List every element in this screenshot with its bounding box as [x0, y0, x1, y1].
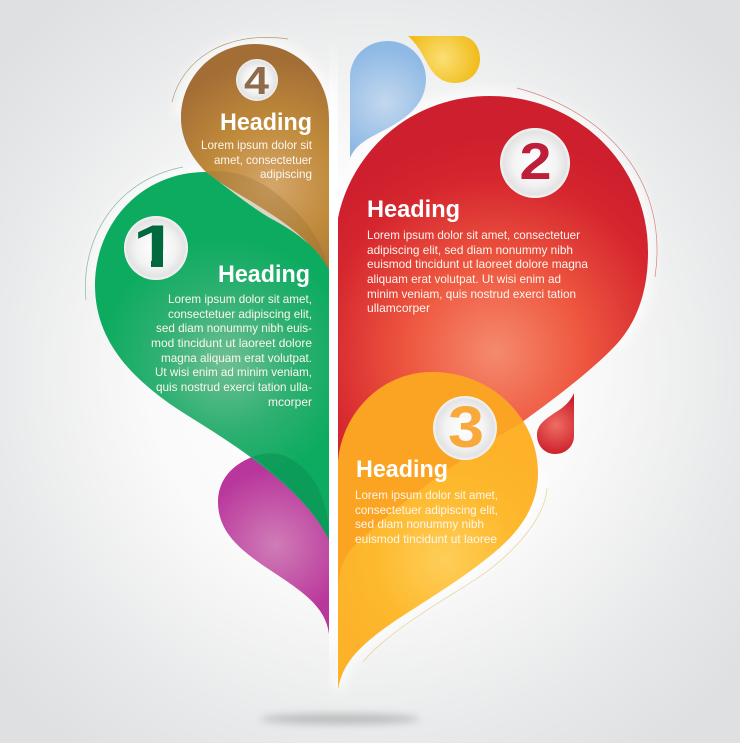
text 1: mod tincidunt ut laoreet dolore [151, 336, 312, 350]
text 4: adipiscing [260, 167, 312, 181]
badge 3 [433, 395, 497, 460]
badge 4 [236, 59, 278, 103]
heading 4: Heading [220, 109, 312, 136]
text 1: magna aliquam erat volutpat. [161, 351, 312, 365]
text 3 [355, 488, 498, 546]
ground shadow [260, 714, 420, 724]
drop: yellow small [408, 36, 480, 83]
text 2: Lorem ipsum dolor sit amet, consectetuer [367, 228, 580, 242]
text 1: mcorper [268, 395, 312, 409]
heading 2: Heading [367, 196, 460, 223]
text 2: ullamcorper [367, 301, 430, 315]
panel: purple drop [218, 457, 329, 634]
panel 3: yellow drop [338, 360, 560, 690]
text 3: Lorem ipsum dolor sit amet, [355, 488, 498, 502]
shape: red drop [338, 96, 648, 590]
overlap shade on brown [206, 171, 329, 270]
text 3: consectetuer adipiscing elit, [355, 503, 498, 517]
drop: blue [350, 41, 426, 158]
arc: brown [172, 37, 288, 102]
heading 1: Heading [218, 261, 310, 288]
heading 3: Heading [356, 456, 448, 483]
badge 1: 1 [132, 213, 178, 280]
panel 4: brown drop [172, 37, 329, 275]
text 1 [151, 292, 312, 409]
badge 3: 3 [448, 395, 484, 460]
text 2: adipiscing elit, sed diam nonummy nibh [367, 243, 573, 257]
badge 1 [124, 213, 188, 280]
panel 1: green drop [85, 167, 329, 540]
arc: yellow [363, 488, 547, 662]
shape: green drop [95, 172, 329, 540]
drop: red small [537, 393, 574, 454]
text 1: consectetuer adipiscing elit, [168, 307, 312, 321]
text 1: Ut wisi enim ad minim veniam, [155, 365, 312, 379]
centre channel [329, 40, 338, 690]
text 1: Lorem ipsum dolor sit amet, [168, 292, 312, 306]
text 1: quis nostrud exerci tation ulla- [156, 380, 312, 394]
arc: red [517, 88, 657, 277]
shape: brown drop [181, 44, 329, 275]
text 2: minim veniam, quis nostrud exerci tation [367, 287, 576, 301]
text 4: amet, consectetuer [214, 153, 312, 167]
text 1: sed diam nonummy nibh euis- [156, 321, 312, 335]
overlap shade on green [252, 453, 329, 540]
overlap shade on yellow [338, 372, 524, 584]
text 3: sed diam nonummy nibh [355, 517, 484, 531]
panel 2: red drop [338, 88, 657, 590]
text 2: euismod tincidunt ut laoreet dolore magna [367, 257, 588, 271]
text 4 [201, 138, 313, 181]
badge 2 [500, 128, 570, 198]
text 4: Lorem ipsum dolor sit [201, 138, 313, 152]
badge 2: 2 [520, 133, 552, 191]
text 3: euismod tincidunt ut laoree [355, 532, 497, 546]
arc: green [85, 167, 183, 300]
shape: yellow drop [338, 372, 538, 690]
soft white halo behind the drops [95, 44, 648, 690]
text 2: aliquam erat volutpat. Ut wisi enim ad [367, 272, 561, 286]
text 2 [367, 228, 588, 315]
badge 4: 4 [244, 60, 269, 103]
